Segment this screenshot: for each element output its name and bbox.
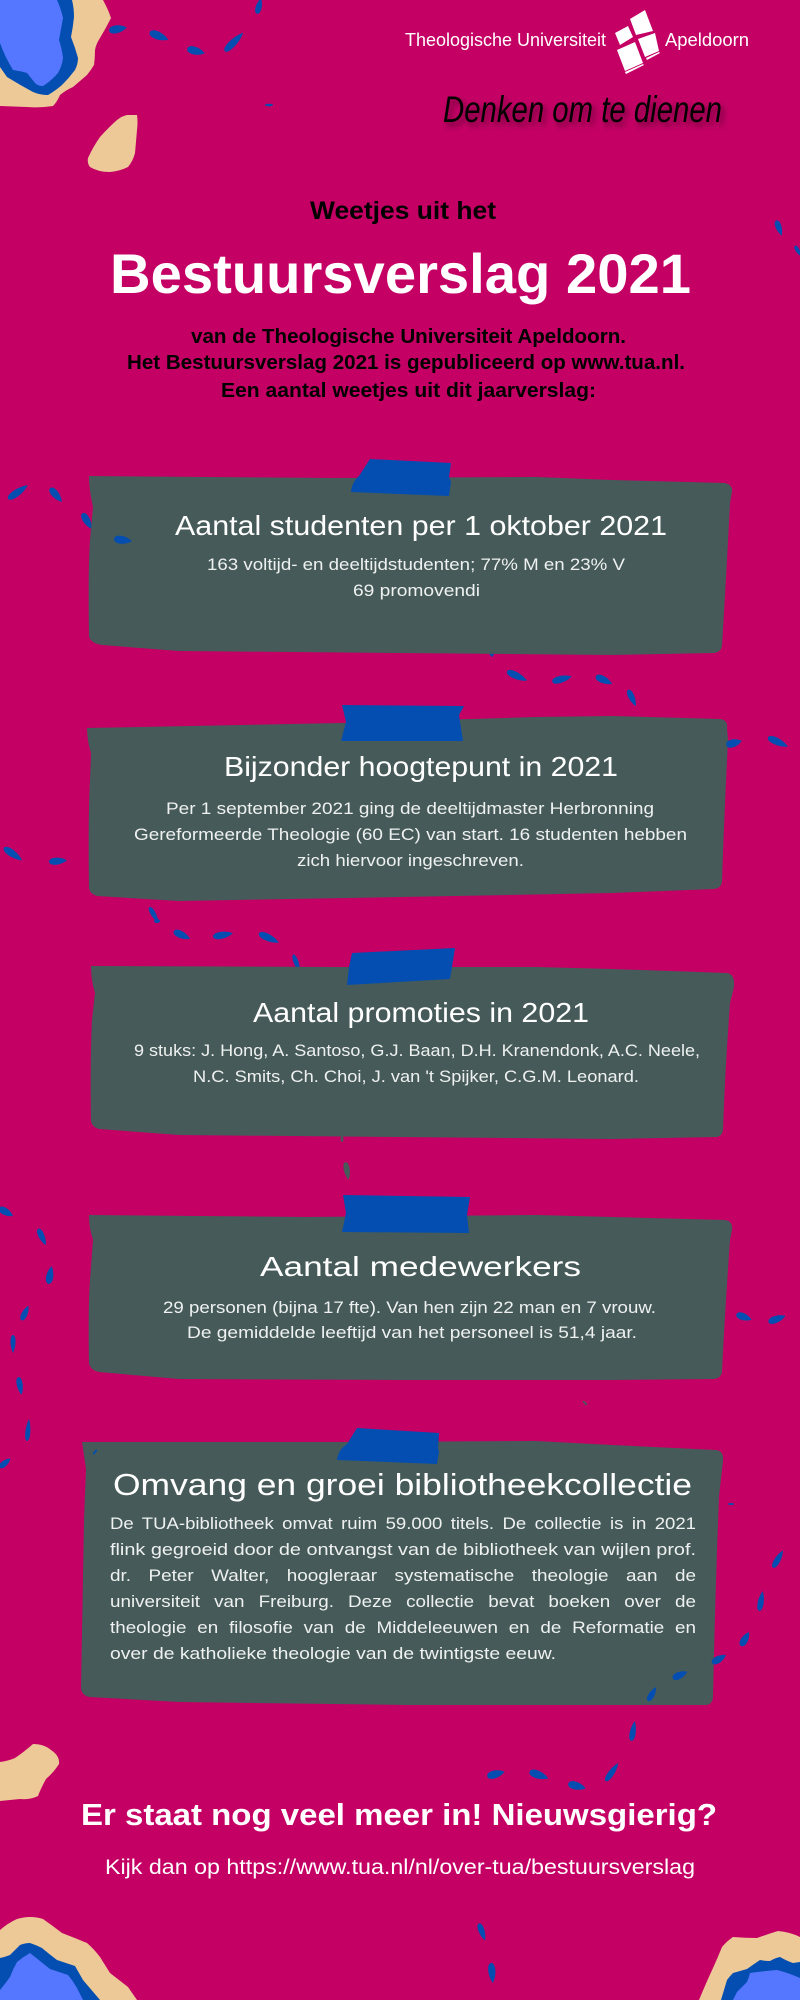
text: bibliotheekcollectie: universiteit van Freiburg. Deze collectie bevat boeken over de [110,1592,696,1611]
text: hoogtepunt: Gereformeerde Theologie (60 EC) van start. 16 studenten hebben [134,825,687,844]
decoration: bottom-left island [0,1917,137,2000]
text: medewerkers [163,1298,656,1342]
decoration: top-left island [0,0,111,107]
text: hoogtepunt [134,799,687,870]
panel: medewerkers [89,1195,732,1380]
tape: studenten [351,459,451,496]
tape: hoogtepunt [341,705,464,741]
heading: hoogtepunt: Bijzonder hoogtepunt in 2021 [224,751,618,782]
text: bibliotheekcollectie [110,1514,696,1663]
text: medewerkers: De gemiddelde leeftijd van het personeel is 51,4 jaar. [187,1323,637,1342]
text: studenten: 69 promovendi [353,581,480,600]
heading: bibliotheekcollectie: Omvang en groei bibliotheekcollectie [113,1467,692,1502]
panel: hoogtepunt [87,705,728,901]
slogan: Denken om te dienen [443,89,722,130]
tape: medewerkers [342,1195,470,1233]
text: promoties: N.C. Smits, Ch. Choi, J. van 't Spijker, C.G.M. Leonard. [193,1067,639,1086]
intro text: van de Theologische Universiteit Apeldoorn. [191,325,626,348]
text: studenten [207,555,626,600]
icon: book cross [615,10,660,74]
logo: Theologische Universiteit Apeldoorn [405,10,749,74]
tape: promoties [347,948,455,985]
text: promoties: 9 stuks: J. Hong, A. Santoso, G.J. Baan, D.H. Kranendonk, A.C. Neele, [134,1041,700,1060]
intro text [127,325,685,402]
closing link: Kijk dan op https://www.tua.nl/nl/over-tua/bestuursverslag [105,1856,695,1879]
intro heading: Weetjes uit het [310,197,497,225]
text: studenten: 163 voltijd- en deeltijdstudenten; 77% M en 23% V [207,555,626,574]
text: promoties [134,1041,700,1086]
decoration: bottom-right island [699,1931,800,2000]
text: bibliotheekcollectie: flink gegroeid door de ontvangst van de bibliotheek van wijlen prof. [110,1540,696,1559]
text: bibliotheekcollectie: over de katholieke theologie van de twintigste eeuw. [110,1644,556,1663]
tape: bibliotheekcollectie [337,1428,439,1464]
text: bibliotheekcollectie: theologie en filosofie van de Middeleeuwen en de Reformatie en [110,1618,696,1637]
panel: promoties [91,948,734,1139]
panel: studenten [89,459,732,655]
panel: bibliotheekcollectie [81,1428,723,1705]
heading: studenten: Aantal studenten per 1 oktober 2021 [175,510,667,541]
text: hoogtepunt: zich hiervoor ingeschreven. [297,851,524,870]
heading: medewerkers: Aantal medewerkers [260,1251,581,1282]
heading: promoties: Aantal promoties in 2021 [253,997,589,1028]
decoration: beige blob bottom-left [0,1744,59,1801]
title: Bestuursverslag 2021 [110,242,691,305]
decoration: beige blob top [88,115,138,172]
text: medewerkers: 29 personen (bijna 17 fte). Van hen zijn 22 man en 7 vrouw. [163,1298,656,1317]
text: bibliotheekcollectie: dr. Peter Walter, hoogleraar systematische theologie aan de [110,1566,696,1585]
intro text: Het Bestuursverslag 2021 is gepubliceerd op www.tua.nl. [127,351,685,374]
intro text: Een aantal weetjes uit dit jaarverslag: [221,379,596,402]
text: hoogtepunt: Per 1 september 2021 ging de deeltijdmaster Herbronning [166,799,654,818]
logo text right: Apeldoorn [665,29,749,50]
decoration: teal droplets [340,1136,588,1406]
closing heading: Er staat nog veel meer in! Nieuwsgierig? [81,1797,717,1832]
logo text left: Theologische Universiteit [405,29,606,50]
decoration: droplets behind the cards [79,511,495,970]
text: bibliotheekcollectie: De TUA-bibliotheek omvat ruim 59.000 titels. De collectie is in 2021 [110,1514,696,1533]
